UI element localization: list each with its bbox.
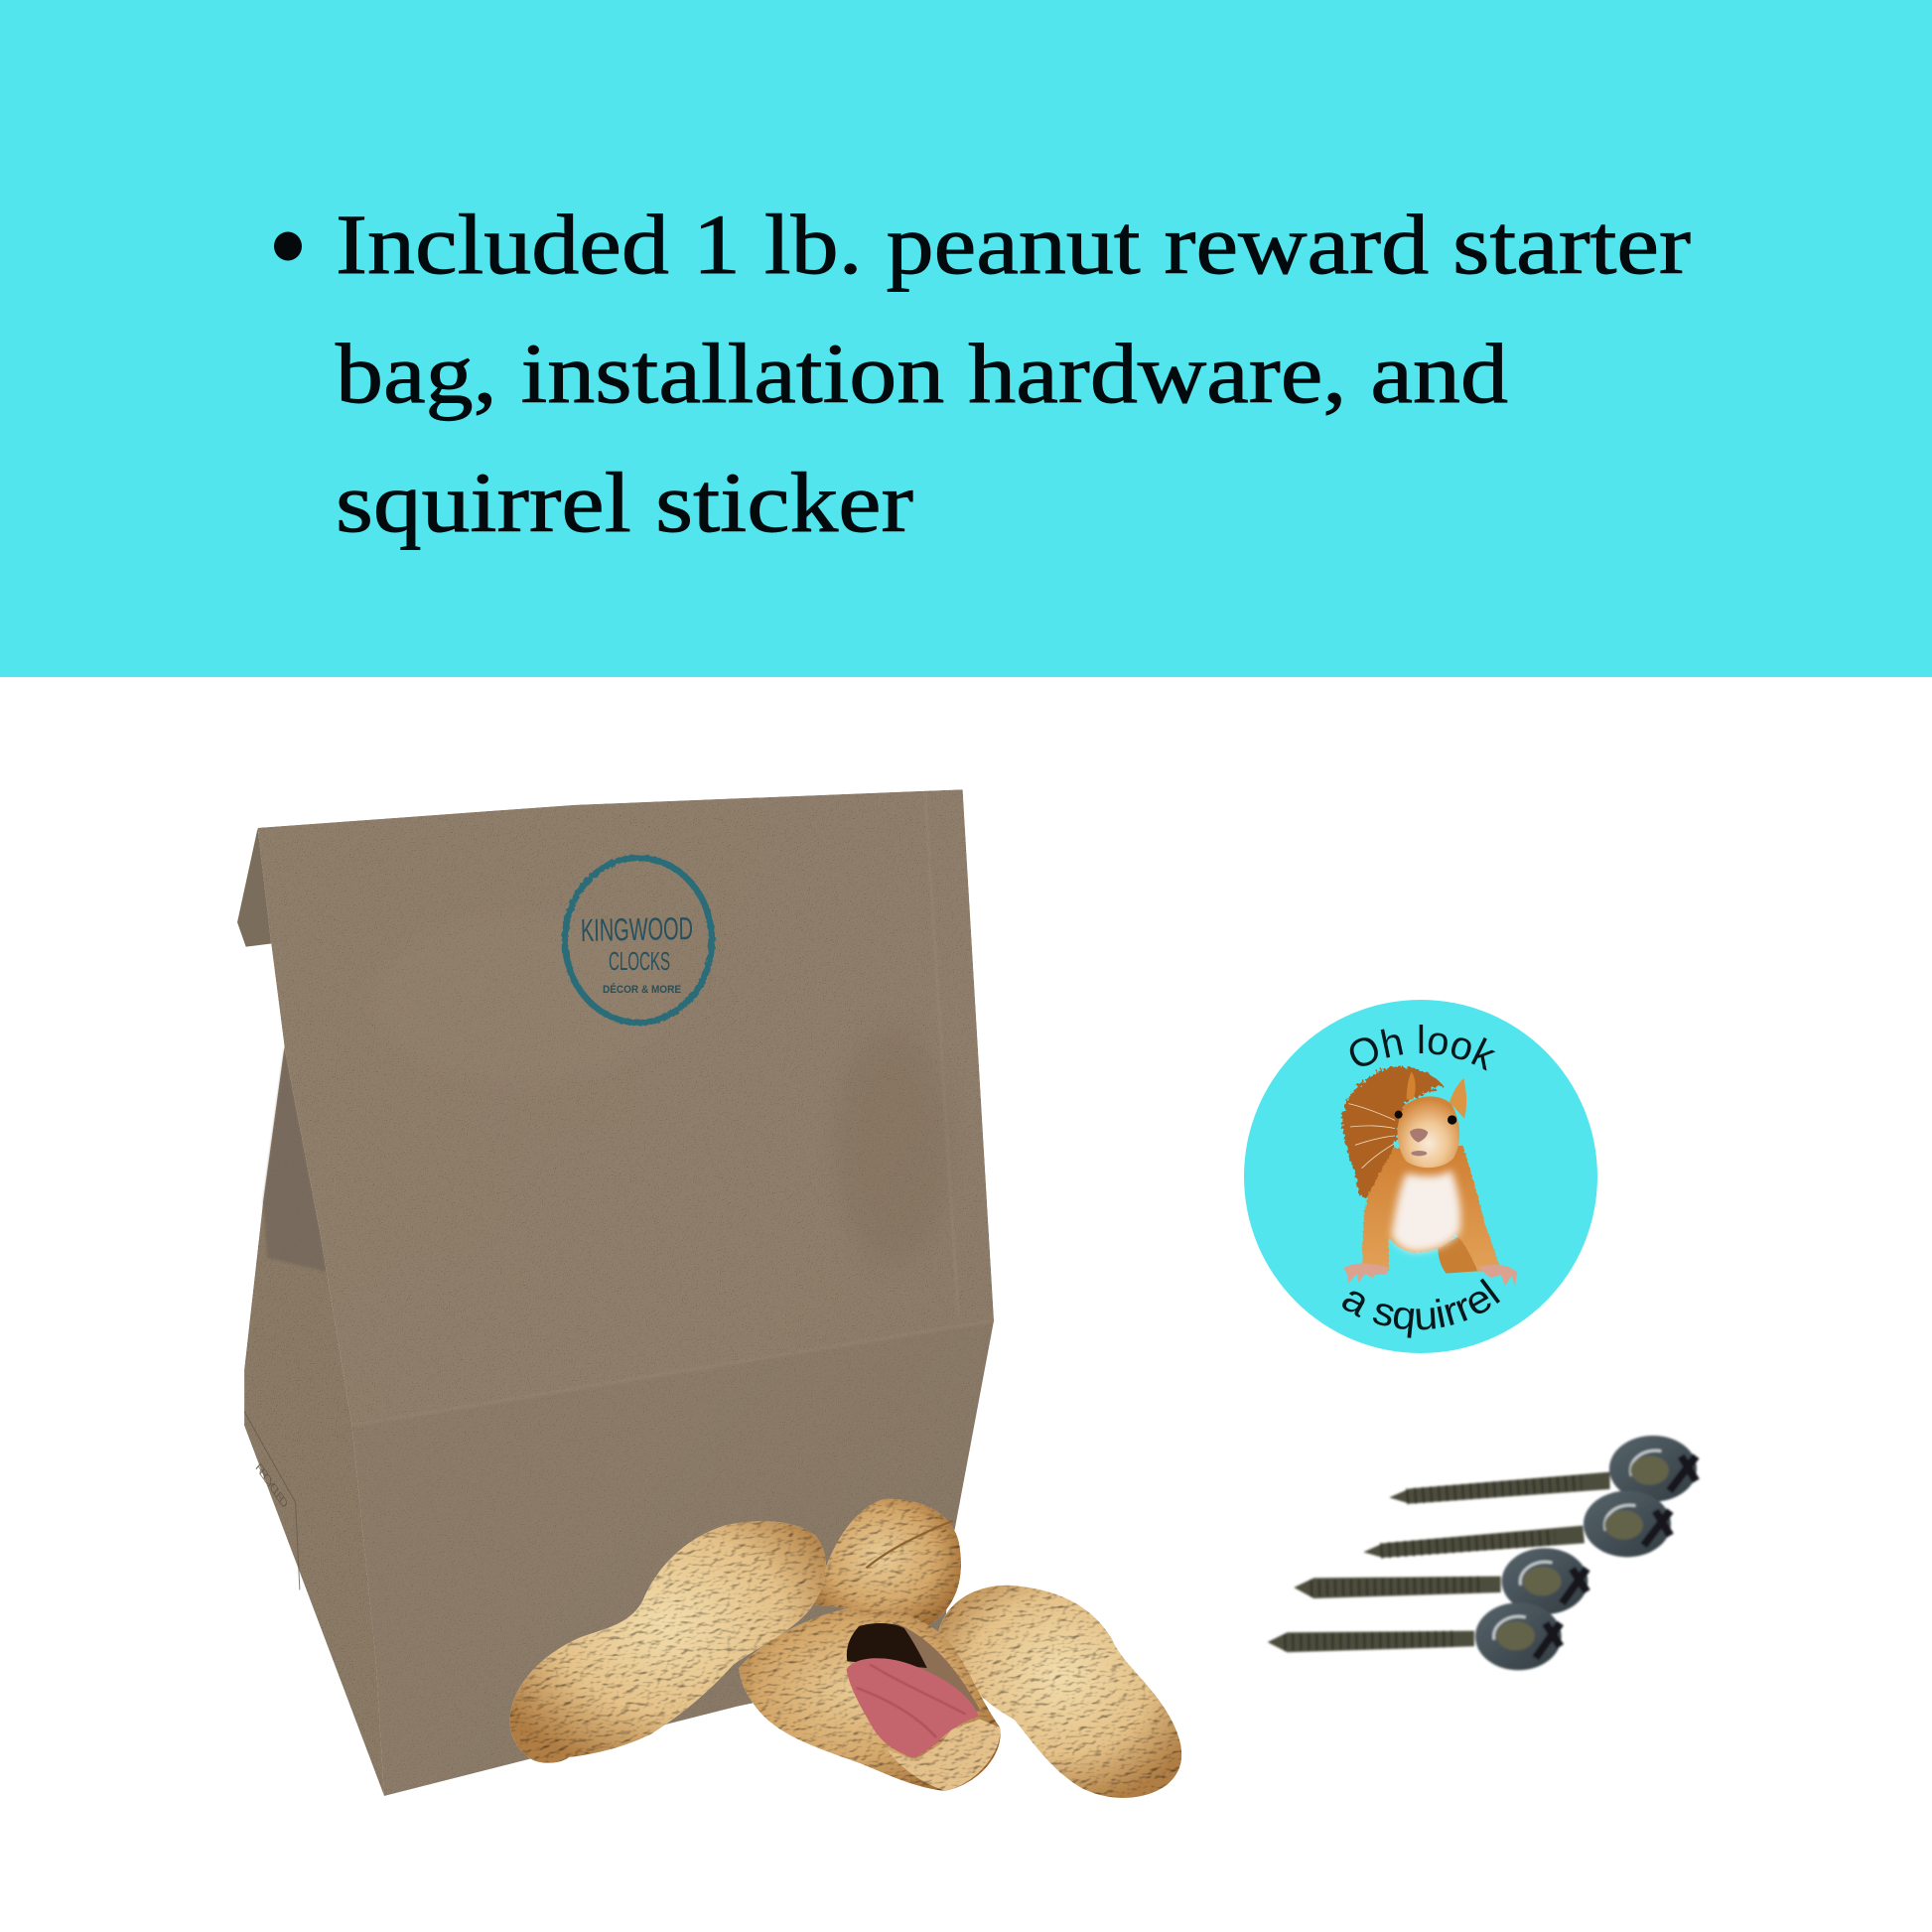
sticker: oh look a squirrel xyxy=(1244,1000,1597,1353)
left paw xyxy=(1343,1264,1388,1284)
mouth xyxy=(1411,1151,1427,1156)
recycled print box xyxy=(244,1412,300,1589)
text block: included items bullet xyxy=(274,197,1691,550)
bullet dot xyxy=(274,232,302,260)
screw 2 xyxy=(1363,1491,1671,1558)
bag side gusset xyxy=(244,1044,425,1796)
right paw xyxy=(1477,1265,1517,1287)
text line 3: squirrel sticker xyxy=(336,455,913,550)
crease xyxy=(351,1320,994,1426)
stamp text: DÉCOR & MORE xyxy=(603,983,681,996)
squirrel tail xyxy=(1342,1066,1443,1197)
side seam xyxy=(925,791,958,1313)
gusset shading xyxy=(263,1048,327,1272)
panel: turquoise header band xyxy=(0,0,1932,677)
right ear xyxy=(1449,1078,1466,1119)
left ear xyxy=(1407,1071,1416,1099)
inner shell wall xyxy=(893,1622,980,1711)
squirrel body xyxy=(1362,1145,1501,1272)
peanut: right xyxy=(938,1586,1181,1798)
stamp text xyxy=(581,910,693,996)
lower fold area xyxy=(351,1320,994,1796)
paper bag xyxy=(237,789,994,1796)
peanut: left large xyxy=(510,1521,826,1763)
stamp: KingWood Clocks logo xyxy=(565,858,712,1023)
red kernel xyxy=(847,1658,979,1758)
screw 3 xyxy=(1294,1548,1587,1614)
folded top flap xyxy=(237,828,274,947)
text line 1: Included 1 lb. peanut reward starter xyxy=(336,197,1691,292)
stamp text: CLOCKS xyxy=(609,946,670,976)
recycled print box: RECYCLED xyxy=(253,1460,290,1511)
stamp ring xyxy=(565,858,712,1023)
white chest xyxy=(1392,1170,1460,1252)
squirrel hind foot xyxy=(1438,1234,1482,1274)
screw 1 xyxy=(1389,1436,1697,1504)
installation hardware: four screws xyxy=(1268,1436,1697,1670)
nose xyxy=(1410,1129,1428,1143)
a squirrel: a squirrel xyxy=(1342,1279,1500,1338)
peanut: back xyxy=(815,1499,961,1626)
torn shell edge xyxy=(889,1720,1000,1791)
text line 2: bag, installation hardware, and xyxy=(336,326,1508,421)
sticker text xyxy=(1342,1025,1500,1338)
eyes xyxy=(1395,1111,1403,1119)
screw 4 xyxy=(1268,1602,1562,1670)
dark opening xyxy=(847,1623,927,1668)
tail whiskers xyxy=(1348,1104,1395,1169)
sticker disc xyxy=(1244,1000,1597,1353)
stain patches xyxy=(834,1028,952,1265)
peanut: opened xyxy=(739,1607,1001,1791)
squirrel head xyxy=(1398,1096,1459,1168)
peanuts xyxy=(510,1499,1181,1798)
oh look: Oh look xyxy=(1350,1025,1495,1071)
stamp text: KINGWOOD xyxy=(581,910,693,948)
bag front panel xyxy=(258,789,994,1796)
